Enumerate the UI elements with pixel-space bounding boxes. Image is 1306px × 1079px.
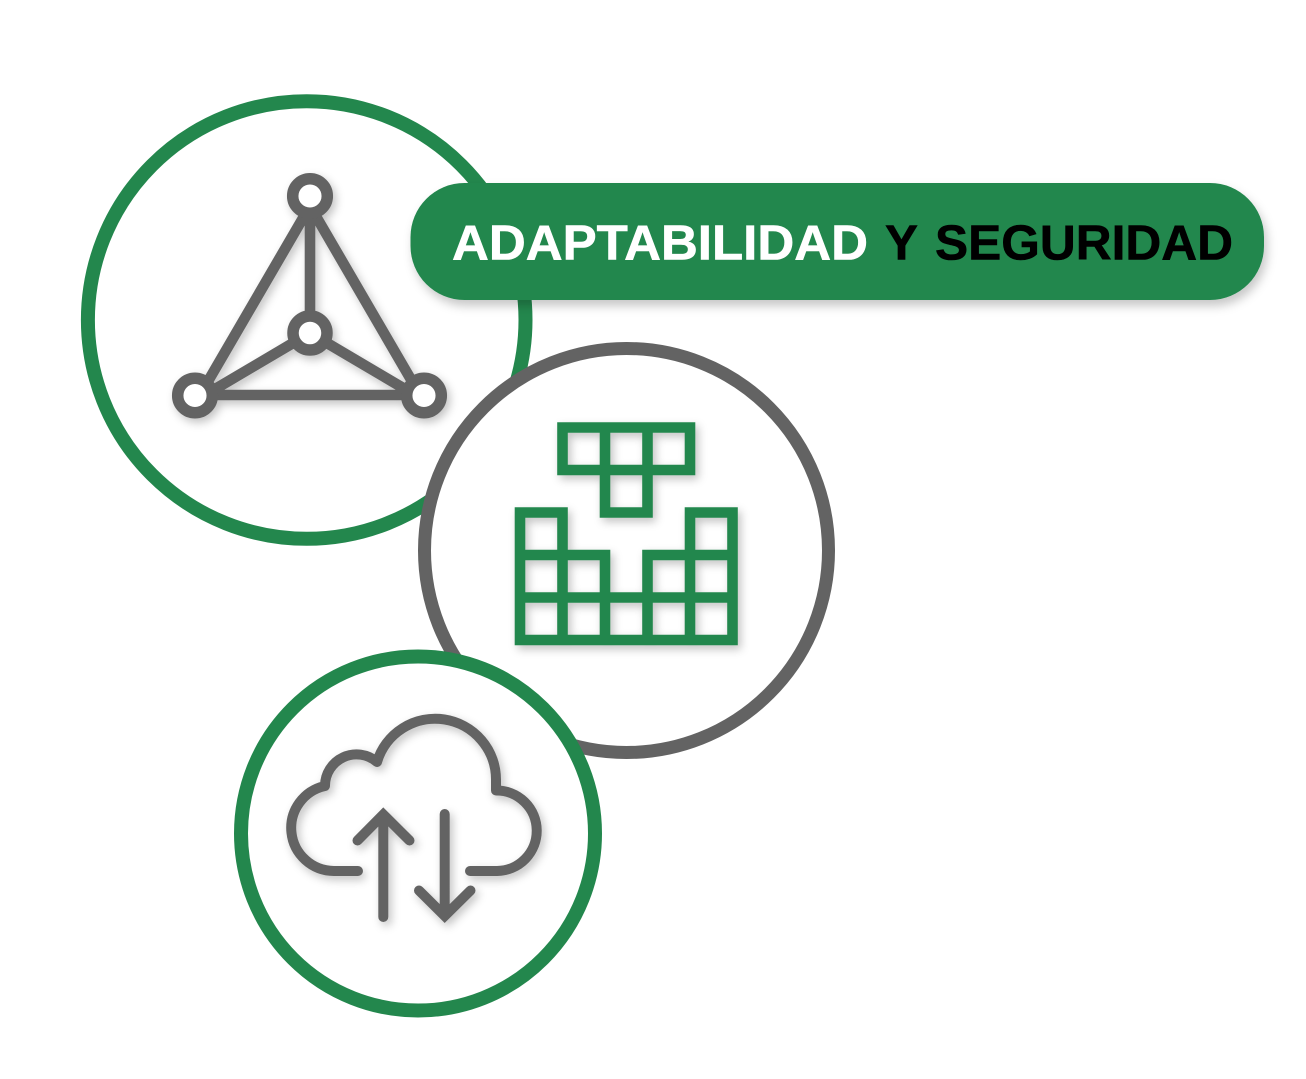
panel: network circle xyxy=(88,101,525,539)
arrow: down xyxy=(419,814,470,916)
banner pill xyxy=(410,183,1264,300)
arrow: up xyxy=(358,814,410,917)
circle outline: blocks xyxy=(424,348,828,752)
icon: falling blocks xyxy=(520,428,732,640)
banner: adaptabilidad y seguridad xyxy=(410,183,1264,300)
heading: white words: ADAPTABILIDAD xyxy=(452,216,868,270)
heading: connector word: Y xyxy=(885,216,918,270)
circle outline: network xyxy=(88,101,525,539)
cloud outline xyxy=(291,719,537,871)
icon: cloud transfer xyxy=(291,719,537,917)
heading: black word: SEGURIDAD xyxy=(935,216,1233,270)
icon: network triangle xyxy=(178,179,441,413)
panel: blocks circle xyxy=(424,348,828,752)
panel: cloud circle xyxy=(241,656,595,1010)
circle outline: cloud xyxy=(241,656,595,1010)
